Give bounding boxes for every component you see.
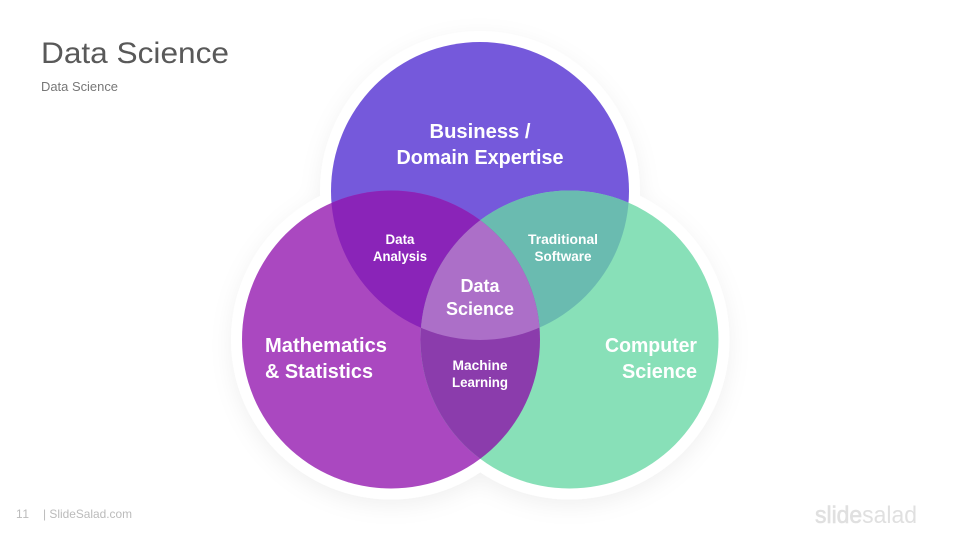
label: data science centre [446, 276, 514, 319]
logo: slidesalad: slidesalad [815, 502, 917, 529]
label: mathematics and statistics [265, 335, 387, 383]
footer site name: | SlideSalad.com [43, 507, 132, 521]
overlap: data analysis [332, 190, 480, 328]
label: mathematics and statistics: Mathematics [265, 335, 387, 357]
venn diagram [231, 31, 730, 500]
title: Data Science [41, 37, 229, 70]
overlap: traditional software [421, 190, 628, 328]
overlap: machine learning [420, 220, 540, 459]
label: data analysis: Analysis [373, 248, 427, 264]
label: business / domain expertise: Domain Expertise [396, 147, 564, 169]
label: machine learning [452, 357, 508, 390]
overlap: data science centre [421, 220, 540, 340]
label: business / domain expertise [396, 121, 564, 169]
subtitle: Data Science [41, 80, 118, 94]
circle: business / domain expertise [331, 42, 629, 340]
label: traditional software: Traditional [528, 231, 598, 247]
label: traditional software [528, 231, 598, 264]
label: data science centre: Science [446, 299, 514, 319]
label: data analysis: Data [386, 231, 415, 247]
circle: computer science [420, 190, 718, 488]
label: computer science [605, 335, 697, 383]
white halo behind circles [231, 31, 730, 500]
label: data analysis [373, 231, 427, 264]
label: traditional software: Software [534, 248, 592, 264]
label: machine learning: Machine [452, 357, 508, 373]
label: business / domain expertise: Business / [430, 121, 531, 143]
label: computer science: Science [622, 361, 697, 383]
label: machine learning: Learning [452, 374, 508, 390]
circle: mathematics and statistics [242, 190, 540, 488]
label: computer science: Computer [605, 335, 697, 357]
label: mathematics and statistics: & Statistics [265, 361, 373, 383]
page number: 11 [16, 507, 29, 521]
label: data science centre: Data [460, 276, 500, 296]
